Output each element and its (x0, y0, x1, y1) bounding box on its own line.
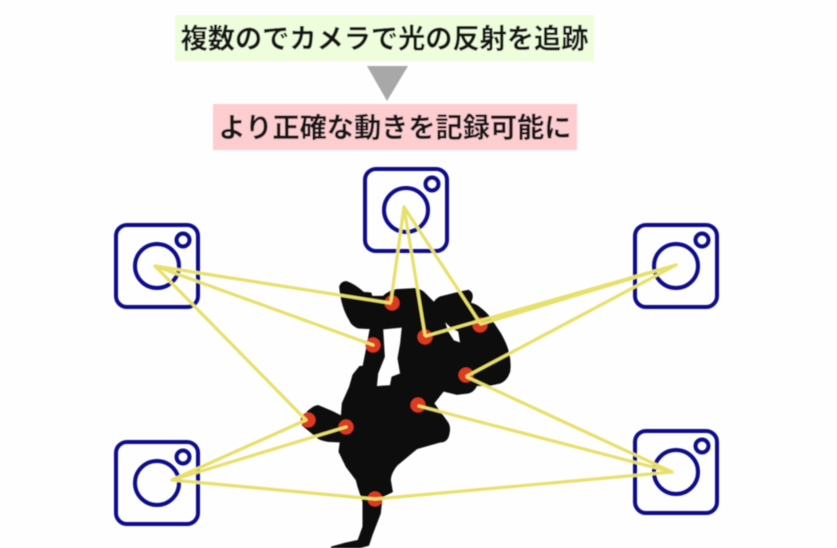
arrow: down triangle (367, 66, 408, 101)
silhouette: breakdancer in a handstand (303, 282, 510, 547)
icon: camera bottom right (635, 431, 717, 513)
icon: camera top left (116, 225, 198, 307)
tracking lines (155, 207, 676, 499)
icon: camera top right (635, 225, 717, 307)
reflective markers (300, 296, 488, 506)
heading: more accurate recording: より正確な動きを記録可能に (219, 112, 571, 143)
heading: more accurate recording (213, 104, 577, 150)
icon: camera bottom left (116, 442, 198, 524)
heading: tracking reflected light: 複数のでカメラで光の反射を追跡 (181, 23, 588, 54)
icon: camera top centre (365, 169, 447, 251)
heading: tracking reflected light (175, 15, 594, 61)
